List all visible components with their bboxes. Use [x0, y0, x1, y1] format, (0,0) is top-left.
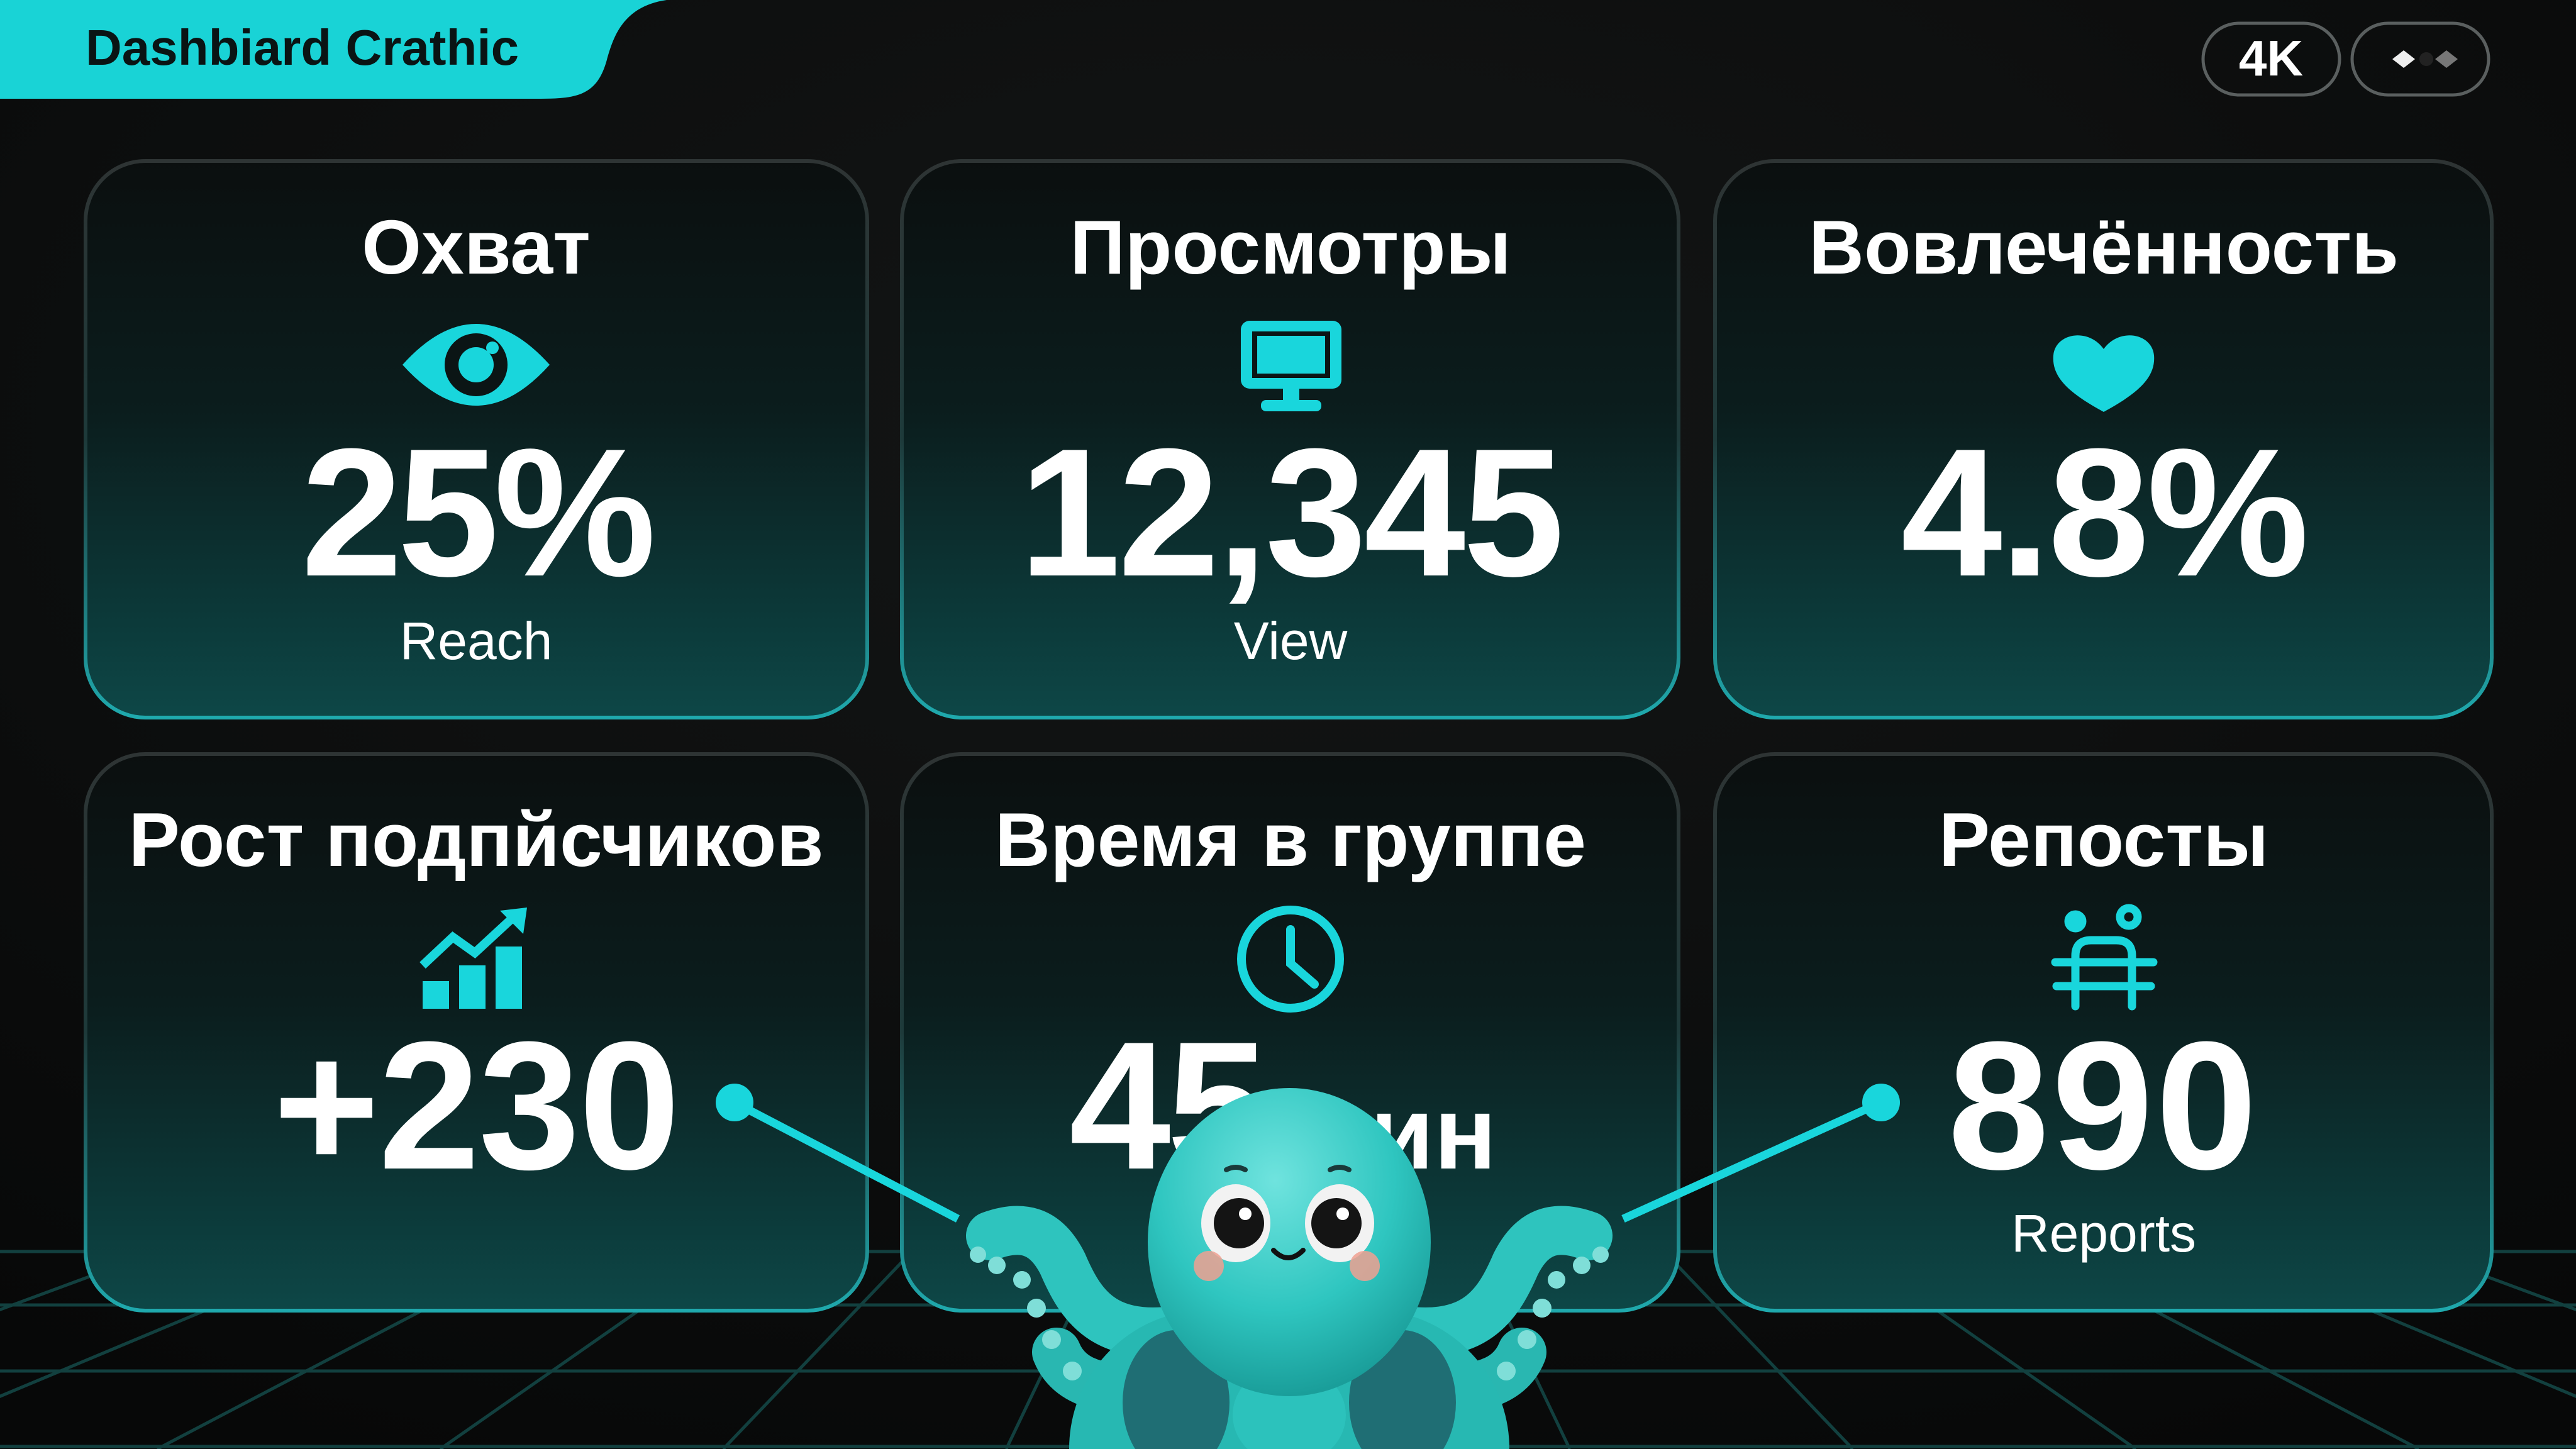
floor grid [0, 1252, 2576, 1449]
lower body / legs [1069, 1311, 1509, 1449]
header tab [0, 0, 667, 99]
panel: Охват [86, 161, 867, 718]
panel: Просмотры [902, 161, 1679, 718]
icon: heart [2053, 335, 2154, 412]
pill: 4K [2203, 23, 2340, 95]
smile [1274, 1250, 1303, 1258]
panel: Рост подписчиков [86, 754, 867, 1311]
heading: Вовлечённость [1809, 204, 2399, 290]
value: 45 мин [1069, 1004, 1497, 1208]
panel: Время в группе [902, 754, 1679, 1311]
label: Reach [400, 611, 552, 670]
suckers [970, 1246, 1609, 1409]
heading: Репосты [1939, 797, 2268, 882]
icon: growth chart [423, 908, 527, 1009]
icon: clock [1241, 910, 1340, 1008]
octopus mascot [970, 1088, 1609, 1449]
value: 25% [301, 411, 653, 614]
arrow: left connector [716, 1084, 958, 1219]
label: View [1234, 611, 1348, 670]
heading: Рост подпйсчиков [129, 797, 823, 882]
arrow: right connector [1623, 1084, 1900, 1219]
value: 12,345 [1019, 411, 1562, 614]
label: Reports [2011, 1204, 2196, 1263]
value: +230 [273, 1004, 679, 1208]
panel: Репосты [1715, 754, 2492, 1311]
heading: Охват [362, 204, 591, 290]
head [1148, 1088, 1431, 1396]
heading: Просмотры [1070, 204, 1511, 290]
value: 4.8% [1901, 411, 2307, 614]
icon: eye [402, 324, 550, 406]
pill: 4K: 4K [2239, 30, 2303, 86]
eyes [1201, 1184, 1270, 1262]
pill: dots [2352, 23, 2489, 95]
blush [1194, 1251, 1224, 1281]
panel: Вовлечённость [1715, 161, 2492, 718]
header title: Dashbiard Crathic [86, 19, 519, 75]
icon: repost [2055, 908, 2153, 1006]
value: 890 [1948, 1004, 2260, 1208]
tentacles [991, 1230, 1588, 1389]
heading: Время в группе [995, 797, 1586, 882]
icon: monitor [1241, 321, 1341, 411]
